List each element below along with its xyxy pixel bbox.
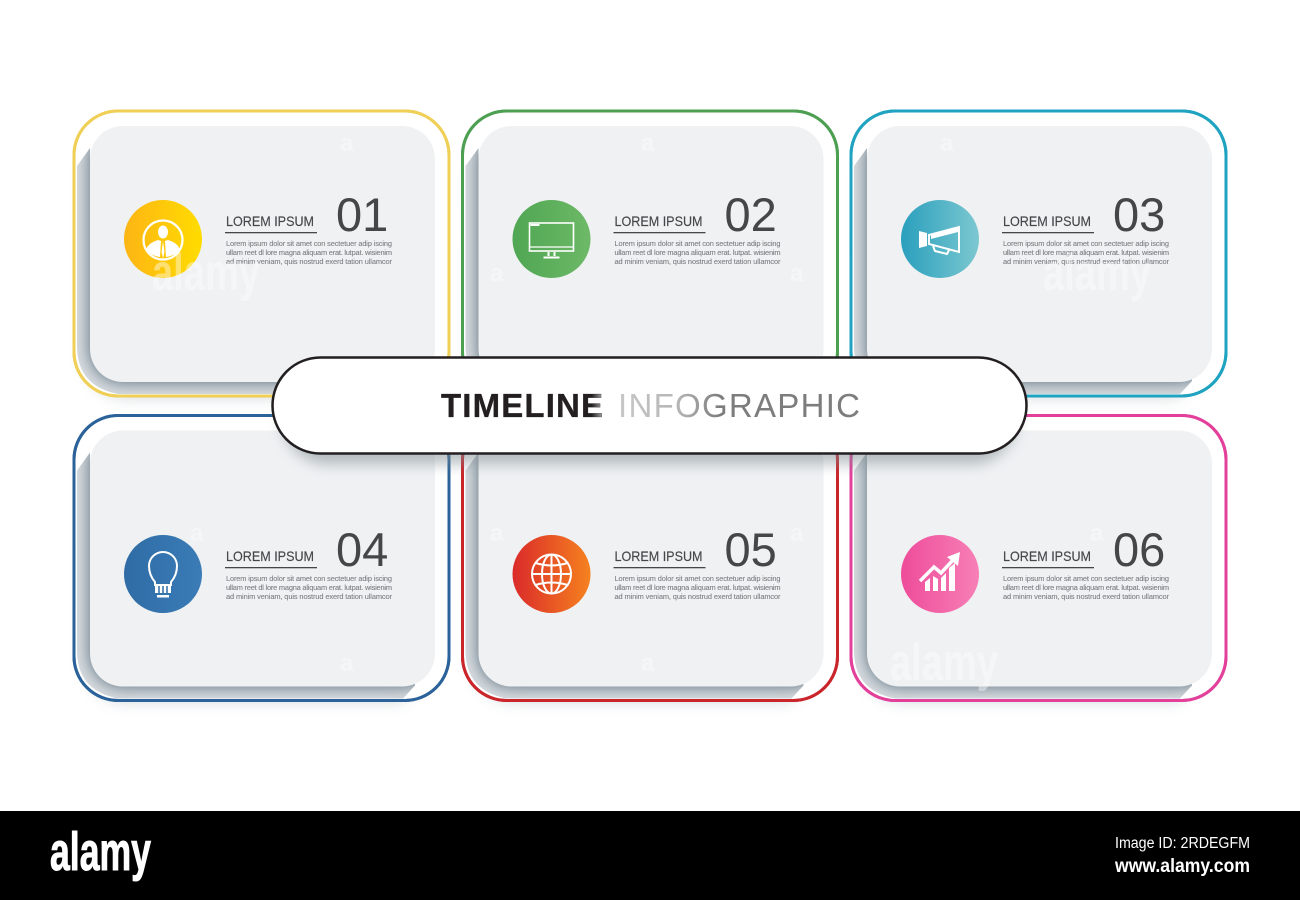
watermarks: a [490,520,504,547]
body text 04: ad minim veniam, quis nostrud exerd tation ullamcor [226,592,393,601]
body text 04 [226,574,393,601]
watermarks: a [340,130,354,157]
body text 03: ullam reet dl lore magna aliquam erat. lutpat. wisienim [1003,248,1169,257]
number 05: 05 [724,523,777,576]
ring overlay 02 [462,111,838,396]
ring overlay 01 [74,111,449,396]
card 06 [867,430,1212,686]
title [441,387,860,424]
title: INFOGRAPHIC [618,387,860,424]
panel 06 [847,416,1226,704]
icon 02: monitor [512,200,590,278]
number 06: 06 [1113,523,1165,576]
card depth 03 [854,148,1192,394]
website: www.alamy.com [1114,856,1250,877]
watermarks: a [641,650,655,677]
soft shadow 05 [472,454,808,702]
watermarks: alamy [1043,244,1151,302]
soft shadow 06 [861,454,1197,702]
watermarks: a [940,130,954,157]
image id: Image ID: 2RDEGFM [1115,835,1250,852]
watermarks: a [490,260,504,287]
card 05 [478,430,824,686]
title pill shadow [282,372,1017,464]
number 04: 04 [336,523,388,576]
body text 02: Lorem ipsum dolor sit amet con sectetuer adip iscing [614,239,780,248]
body text 06: Lorem ipsum dolor sit amet con sectetuer adip iscing [1003,574,1169,583]
watermarks: alamy [152,244,260,302]
heading 02: LOREM IPSUM [614,214,702,229]
content 05 [512,523,781,613]
soft shadow 03 [861,150,1197,398]
soft shadow 01 [84,150,420,398]
card 02 [478,126,824,382]
icon 01: person [124,200,202,278]
number 01: 01 [336,188,388,241]
ring overlay 04 [74,416,449,700]
body text 02: ullam reet dl lore magna aliquam erat. lutpat. wisienim [614,248,780,257]
outer ring 06 [851,416,1226,700]
card depth 02 [466,148,480,356]
body text 01: ullam reet dl lore magna aliquam erat. lutpat. wisienim [226,248,392,257]
body text 03: ad minim veniam, quis nostrud exerd tation ullamcor [1003,257,1170,266]
body text 01: ad minim veniam, quis nostrud exerd tation ullamcor [226,257,393,266]
heading 04: LOREM IPSUM [226,549,314,564]
panel 01 [70,111,449,400]
body text 05: Lorem ipsum dolor sit amet con sectetuer adip iscing [614,574,780,583]
body text 04: Lorem ipsum dolor sit amet con sectetuer adip iscing [226,574,392,583]
card 01 [90,126,435,382]
soft shadow 04 [84,454,420,702]
content 04 [124,523,393,613]
watermarks: a [340,650,354,677]
number 02: 02 [724,188,777,241]
icon 06: growth chart [901,535,979,613]
body text 01 [226,239,393,266]
watermarks: a [641,130,655,157]
panel 05 [461,454,839,708]
outer ring 03 [851,111,1226,396]
content 06 [901,523,1170,613]
icon 05: globe [512,535,590,613]
body text 06: ullam reet dl lore magna aliquam erat. lutpat. wisienim [1003,583,1169,592]
body text 05: ullam reet dl lore magna aliquam erat. lutpat. wisienim [614,583,780,592]
panel 03 [847,111,1226,400]
panel 04 [70,416,449,704]
body text 05 [614,574,781,601]
card 03 [867,126,1212,382]
title pill [272,358,1026,454]
watermarks: a [790,520,804,547]
ring overlay 06 [851,416,1226,700]
body text 03: Lorem ipsum dolor sit amet con sectetuer adip iscing [1003,239,1169,248]
watermarks: a [190,520,204,547]
card depth 01 [77,148,278,394]
body text 05: ad minim veniam, quis nostrud exerd tation ullamcor [614,592,781,601]
watermarks [152,130,1151,692]
body text 03 [1003,239,1170,266]
card depth 04 [77,452,415,698]
body text 01: Lorem ipsum dolor sit amet con sectetuer adip iscing [226,239,392,248]
watermarks: a [790,260,804,287]
outer ring 05 [462,416,838,700]
body text 04: ullam reet dl lore magna aliquam erat. lutpat. wisienim [226,583,392,592]
ring overlay 03 [851,111,1226,396]
card depth 05 [466,454,804,698]
heading 01: LOREM IPSUM [226,214,314,229]
footer bar [0,811,1300,900]
footer logo: alamy [50,822,151,882]
watermarks: a [1090,520,1104,547]
body text 02: ad minim veniam, quis nostrud exerd tation ullamcor [614,257,781,266]
card 04 [90,430,435,686]
heading 05: LOREM IPSUM [614,549,702,564]
icon 03: megaphone [901,200,979,278]
ring overlay 05 [462,416,838,700]
heading 03: LOREM IPSUM [1003,214,1091,229]
body text 06: ad minim veniam, quis nostrud exerd tation ullamcor [1003,592,1170,601]
card depth 06 [854,454,1192,698]
outer ring 01 [74,111,449,396]
title: TIMELINE [441,387,603,424]
outer ring 04 [74,416,449,700]
body text 02 [614,239,781,266]
outer ring 02 [462,111,838,396]
soft shadow 02 [472,150,808,398]
number 03: 03 [1113,188,1165,241]
panel 02 [461,110,839,356]
heading 06: LOREM IPSUM [1003,549,1091,564]
icon 04: light bulb [124,535,202,613]
watermarks: alamy [890,634,998,692]
body text 06 [1003,574,1170,601]
